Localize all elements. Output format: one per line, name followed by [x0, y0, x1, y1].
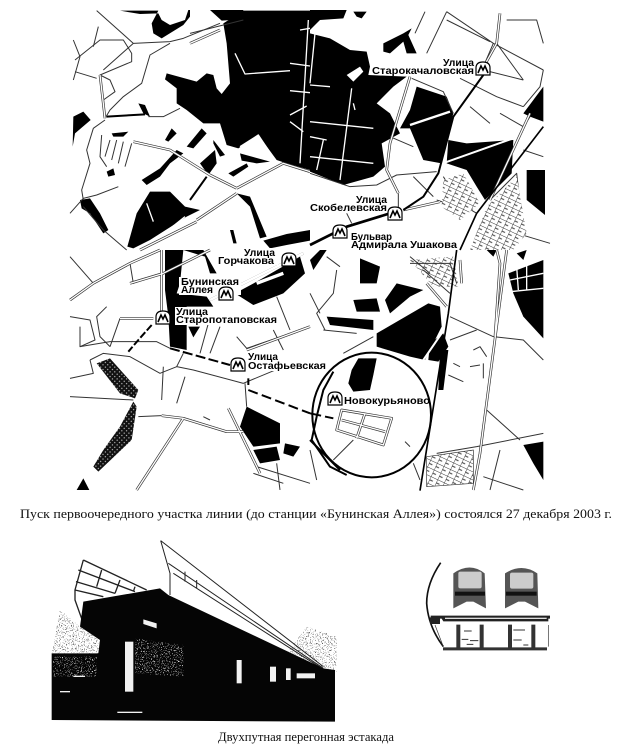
train right — [505, 568, 538, 608]
map: south-east sector with circled district — [310, 250, 543, 491]
station: Улица Старопотаповская — [156, 307, 279, 326]
station: Улица Остафьевская: Улица — [248, 352, 278, 363]
station: Улица Скобелевская: Скобелевская — [310, 202, 387, 214]
station: Бульвар Адмирала Ушакова: Бульвар — [351, 232, 392, 243]
viaduct body — [52, 588, 335, 722]
station: Новокурьяново — [328, 392, 430, 407]
station: Улица Скобелевская: Улица — [356, 195, 387, 206]
station: Бунинская Аллея — [179, 277, 241, 300]
station: Новокурьяново: Новокурьяново — [344, 396, 430, 407]
station: Улица Горчакова — [216, 248, 296, 267]
columns and base — [435, 625, 548, 650]
station: Бульвар Адмирала Ушакова — [333, 225, 458, 251]
station: Улица Старопотаповская: Старопотаповская — [176, 315, 277, 326]
station: Улица Горчакова: Горчакова — [218, 256, 274, 267]
caption: map: Пуск первоочередного участка линии (до станции «Бунинская Аллея») состоялся 27 декабря 2003 г. — [20, 507, 612, 521]
station: Бульвар Адмирала Ушакова: Адмирала Ушакова — [351, 240, 457, 251]
illustration: two-track viaduct photo — [52, 541, 337, 722]
map: north-west sector with forest — [70, 10, 310, 250]
viaduct piers and highlights — [60, 619, 315, 713]
station: Бунинская Аллея: Бунинская — [181, 277, 239, 288]
train left — [453, 567, 486, 608]
station: Бунинская Аллея: Аллея — [181, 285, 213, 296]
station: Улица Скобелевская — [308, 195, 402, 220]
lit wall stipple — [53, 638, 183, 677]
viaduct noise barrier panels — [75, 541, 323, 668]
station: Улица Горчакова: Улица — [244, 248, 275, 259]
station: Улица Остафьевская: Остафьевская — [248, 360, 326, 372]
sky stipple — [52, 610, 337, 672]
circle around Novokuryanovo district — [312, 353, 431, 477]
map: north-east sector — [310, 10, 550, 250]
station: Улица Старокачаловская: Улица — [443, 58, 474, 69]
illustration: double-track cross-section — [427, 563, 550, 650]
station: Улица Старокачаловская — [370, 56, 490, 77]
tunnel wall arc — [427, 563, 443, 647]
deck — [430, 616, 550, 624]
station: Улица Остафьевская — [231, 352, 327, 372]
map: clearings in the forest — [347, 67, 363, 82]
map: south-west sector — [70, 250, 310, 490]
station: Улица Старопотаповская: Улица — [176, 307, 208, 318]
caption: viaduct: Двухпутная перегонная эстакада — [218, 730, 394, 744]
panel: metro line map — [70, 10, 550, 491]
station: Улица Старокачаловская: Старокачаловская — [372, 66, 474, 77]
